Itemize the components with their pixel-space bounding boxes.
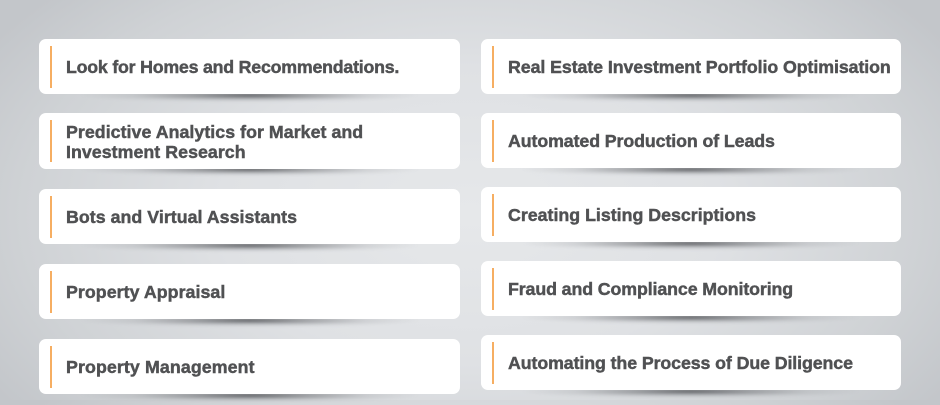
card: predictive analytics — [39, 113, 460, 176]
card: property management: Property Management — [66, 357, 255, 377]
card: listing descriptions — [481, 187, 901, 250]
card: predictive analytics: Investment Research — [66, 142, 246, 162]
card: bots and virtual assistants: Bots and Virtual Assistants — [66, 207, 297, 227]
card: predictive analytics: Predictive Analytics for Market and — [66, 122, 363, 142]
card: bots and virtual assistants — [39, 189, 460, 252]
card: homes and recommendations — [39, 39, 460, 102]
card: due diligence — [481, 335, 901, 398]
panel: left column — [39, 39, 460, 402]
card: listing descriptions: Creating Listing Descriptions — [508, 205, 756, 225]
card: portfolio optimisation — [481, 39, 901, 102]
card: homes and recommendations: Look for Homes and Recommendations. — [66, 57, 399, 77]
panel: right column — [481, 39, 901, 398]
card: portfolio optimisation: Real Estate Investment Portfolio Optimisation — [508, 57, 891, 77]
card: automated leads — [481, 113, 901, 176]
card: fraud and compliance: Fraud and Compliance Monitoring — [508, 279, 793, 299]
card: due diligence: Automating the Process of Due Diligence — [508, 353, 853, 373]
card: fraud and compliance — [481, 261, 901, 324]
card: property appraisal: Property Appraisal — [66, 282, 225, 302]
card: automated leads: Automated Production of Leads — [508, 131, 775, 151]
card: property appraisal — [39, 264, 460, 326]
card: property management — [39, 339, 460, 402]
